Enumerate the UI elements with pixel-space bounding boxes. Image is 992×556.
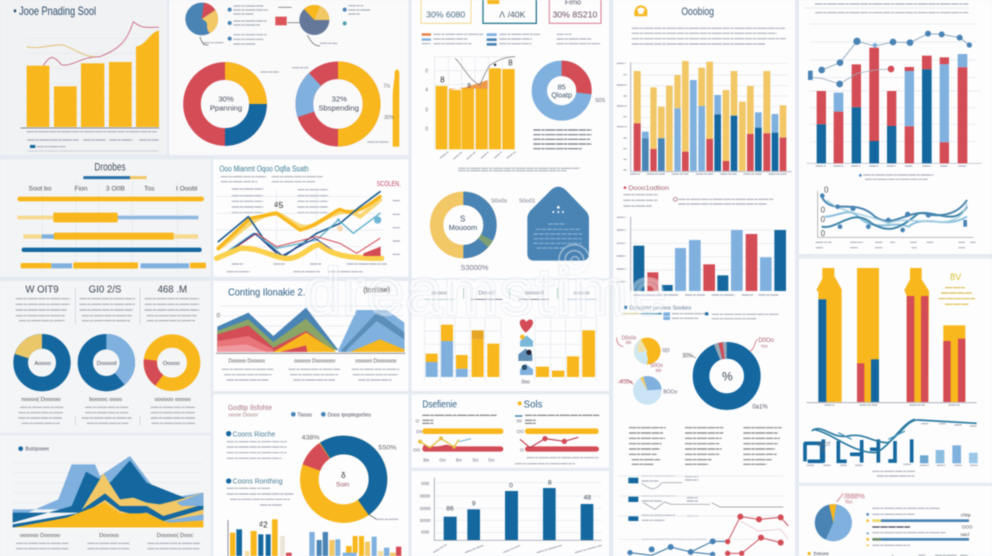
captions: oooooo Dooooooo [355, 359, 397, 365]
kpi box 3 [549, 0, 601, 23]
value labels: 9 [472, 500, 476, 507]
big donut [701, 350, 752, 402]
pie 1 labels: S0Oo [650, 363, 663, 369]
captions: Dooooo [99, 533, 119, 539]
notes [422, 415, 599, 423]
side progress bar: 7/s [383, 84, 391, 90]
progress list [866, 508, 973, 546]
donut: left [192, 71, 258, 137]
footer [515, 458, 598, 464]
donut: right label: Sbspending [318, 104, 359, 113]
pie [815, 504, 852, 541]
bars [444, 488, 593, 540]
watermark spiral [559, 245, 590, 275]
big donut callouts: D0Oo [758, 338, 775, 344]
tab labels [424, 288, 597, 299]
big donut callouts: %o [761, 343, 768, 348]
pie 1 labels: oo [656, 368, 661, 374]
panel: bottle bars [799, 259, 992, 483]
value labels: 0 [425, 108, 428, 114]
value labels: ● [493, 63, 497, 69]
heading left: Dsefienie [422, 400, 457, 411]
column labels: I Ooobl [176, 185, 198, 192]
axis labels [617, 63, 787, 174]
legend [291, 412, 372, 418]
captions [228, 359, 397, 365]
captions: Dooooo( Dooc [157, 533, 193, 539]
panel: layered area chart [0, 435, 211, 556]
heading: • Jooe Pnading Sool [13, 4, 96, 18]
axis labels [420, 481, 431, 535]
stat headings [25, 285, 187, 296]
donut: left label: 30% [218, 95, 234, 104]
step chart [804, 419, 977, 463]
donut: left label: Ppanning [210, 104, 242, 113]
x labels [824, 403, 960, 407]
pie 1 [634, 338, 661, 364]
value labels: 4 [425, 88, 428, 94]
wave axis: 0 [824, 186, 829, 195]
column labels: Tos [144, 185, 155, 192]
heading: Ooobiog [681, 6, 714, 18]
panel: blue bar chart [412, 471, 609, 556]
heading: Conting Ilonakie 2. [228, 287, 305, 298]
note 2: Coons Ronthing [233, 476, 283, 485]
areas [13, 456, 203, 528]
kpi box 3: 30% 8S210 [553, 9, 598, 19]
subheading [623, 185, 773, 206]
line markers [808, 31, 972, 87]
caption text [222, 369, 399, 380]
caption text [16, 543, 200, 549]
donut label: Qloatp [551, 92, 572, 99]
panel: combo bars top right [799, 0, 992, 254]
pie callout: %o [845, 500, 852, 506]
stat headings: W OIT9 [25, 285, 59, 296]
stacked bars [426, 325, 499, 377]
line markers [627, 514, 784, 556]
axis labels: S000 [420, 506, 431, 511]
pie 2 [633, 376, 662, 405]
donut callout: S0S [595, 98, 606, 104]
value labels: 0 [509, 482, 513, 489]
axis labels: Do [473, 458, 479, 463]
captions: oooooo Dooooooo [294, 359, 335, 365]
axis labels: Bo [456, 458, 462, 463]
bars caption [872, 465, 978, 476]
axis labels: O [520, 447, 524, 452]
legends [232, 189, 328, 213]
legend notes [200, 6, 370, 46]
text block [533, 130, 592, 149]
intro text [632, 28, 786, 44]
x labels [440, 152, 580, 171]
house shape note [527, 187, 589, 261]
tab labels: ooooo [574, 291, 590, 297]
captions [20, 533, 193, 539]
panel: multi line chart [213, 159, 408, 277]
yellow bars [536, 330, 595, 377]
panel: three donuts [0, 281, 211, 433]
progress list: chbp [961, 513, 971, 518]
pie: top right [299, 5, 329, 35]
value labels: 8 [440, 75, 445, 84]
yellow note [938, 272, 975, 304]
stacked bars [817, 48, 967, 163]
value labels: 0 [425, 127, 428, 133]
captions: oooooo ooooo [155, 397, 191, 403]
note 2 [226, 476, 293, 505]
gantt bars [17, 197, 206, 269]
orange band and line [449, 57, 515, 90]
donut 1 label: Aoooo [34, 361, 51, 367]
axis labels: S00 [421, 481, 430, 486]
column labels: Fion [75, 185, 88, 192]
pie callout [837, 491, 865, 506]
big donut label: % [722, 369, 733, 383]
yellow note: 8V [950, 272, 962, 282]
donut [539, 68, 584, 113]
axis labels: Oo [439, 458, 446, 463]
stat headings: 468 .M [158, 285, 187, 296]
pie 1 labels: D0o0o [622, 335, 637, 341]
value labels: 0 [425, 69, 428, 75]
pie 2 labels [618, 379, 677, 395]
tab labels: ooooo [431, 291, 447, 297]
bottle bar 2 [857, 268, 879, 402]
pie 2 labels: AS0o [620, 379, 632, 385]
legend [622, 305, 778, 320]
wave axis: 0 [821, 206, 826, 215]
pie 1 labels: 0(0 [662, 348, 670, 354]
table header [815, 4, 968, 13]
donut callouts [261, 68, 388, 142]
axis labels: S000 [420, 518, 431, 523]
captions: oooooo Dooooo [20, 533, 60, 539]
heading: Godtip Ilsfohte [228, 405, 272, 412]
panel: pies and legend [617, 295, 788, 556]
kpi box 1: 30% 6080 [426, 9, 465, 19]
progress list: OOO [962, 525, 973, 530]
heading: Ooo Mianmt Oqoo Oqfia Ssath [219, 164, 309, 173]
donut: right label: 32% [332, 95, 347, 104]
kpi box 2: ᐱ /40K [499, 9, 526, 19]
line chart [630, 517, 788, 555]
pale bars [920, 445, 978, 463]
panel: stacked bars with labels [412, 280, 609, 391]
stat headings: GI0 2/S [89, 285, 121, 296]
donut lower callouts: S0o0s [491, 199, 507, 205]
axis labels: O [416, 418, 420, 423]
donut: right [304, 70, 372, 138]
bottle bar 1 [816, 268, 842, 402]
subheading: Dooo1odtion [628, 185, 670, 192]
tab labels: ooooo0 [525, 291, 544, 297]
pie 2 labels: BOOo [663, 389, 677, 395]
three text columns [629, 428, 782, 464]
legend: Tisoso [297, 412, 312, 418]
captions: noooo( Dooooo [22, 397, 60, 403]
column labels [29, 185, 198, 192]
axis labels: Ba [423, 458, 429, 463]
axis labels: Do [488, 458, 495, 463]
wave axis [816, 186, 976, 248]
axis labels: OO [413, 447, 421, 452]
wave markers [820, 193, 967, 232]
donut lower [437, 198, 490, 252]
side progress bar: 30% [384, 115, 395, 121]
axis labels 2 [617, 217, 626, 282]
small bars: left [228, 519, 292, 556]
donut lower callouts [461, 199, 535, 272]
left lines [418, 436, 471, 449]
line legend rows [618, 476, 783, 539]
wave axis: 0 [821, 229, 826, 238]
red stat: SCOLEN, [377, 179, 401, 188]
donut lower label: S [460, 214, 465, 223]
pie 1 labels: oo [626, 340, 631, 346]
axis labels [227, 201, 400, 272]
sub heading: oooe Dooor [229, 413, 258, 419]
x labels [633, 293, 778, 297]
donut label: 85 [558, 82, 566, 91]
line series [217, 192, 382, 258]
heading: Droobes [94, 161, 126, 173]
captions: booooc oooo [89, 397, 122, 403]
callouts: 438% [302, 434, 320, 441]
panel: mountain chart [213, 281, 408, 391]
donut 1 [21, 341, 63, 384]
step chart labels: OBOT [817, 442, 831, 448]
big donut callouts [682, 338, 775, 411]
stat descriptions [16, 299, 199, 321]
caption text [18, 407, 195, 423]
bars [27, 31, 159, 127]
kpi box 2 [483, 0, 536, 23]
donut 2 [85, 342, 127, 384]
column labels: 3 O0B [106, 185, 125, 192]
kpi box 1 [421, 0, 471, 23]
value labels: 9 [467, 83, 471, 89]
donut [309, 445, 378, 514]
big donut callouts: 0a1% [752, 405, 768, 411]
bar 4 [943, 325, 965, 402]
bar chart [436, 68, 515, 149]
end markers [337, 216, 381, 256]
panel: donut with notes [213, 394, 408, 556]
donut 2 label: Dooood [97, 361, 117, 367]
wave axis: 0 [821, 215, 826, 224]
heading accent [83, 173, 130, 182]
sub heading [221, 177, 323, 182]
heading right: Sols [524, 400, 543, 411]
progress bars [422, 428, 599, 452]
donut 3 label: Ooooo [163, 361, 180, 367]
donut lower label: Mouoom [449, 223, 477, 232]
icons column [518, 319, 533, 385]
axis labels [413, 418, 524, 463]
axis labels [27, 132, 159, 147]
panel: kpi bars and donut [412, 0, 609, 278]
value labels [446, 479, 591, 512]
axis labels: 00 [517, 418, 522, 423]
tab labels: Dooo0 [478, 291, 495, 297]
panel: timeline bars [0, 159, 211, 277]
callouts: 5S0% [378, 444, 396, 451]
watermark: dreamstime [305, 257, 665, 327]
icon: yellow badge [634, 6, 647, 16]
line overlay [810, 34, 969, 84]
value labels [425, 58, 513, 133]
bar chart 2 [633, 230, 786, 291]
note 1 [226, 429, 287, 458]
small bars: left: ₫2 [259, 521, 268, 530]
donut label: δ [341, 471, 346, 480]
panel: revenue bar chart [0, 0, 167, 155]
axis labels: OO [517, 429, 524, 434]
big donut callouts: 30% [682, 352, 692, 359]
panel: tall column of charts [613, 0, 795, 556]
legend: Butripower [25, 447, 50, 453]
note 1: Coons Rioche [233, 429, 275, 438]
pie: top left [185, 3, 218, 35]
x labels [816, 166, 967, 179]
side progress bar [383, 69, 399, 147]
right lines [520, 436, 578, 448]
donut lower callouts: S0o01 [519, 199, 535, 205]
trend lines [27, 22, 159, 66]
value labels: 8 [548, 479, 552, 486]
wave chart [822, 197, 967, 229]
tag: (tonitise) [363, 285, 390, 295]
value labels: 8 [508, 58, 513, 67]
pie callout: /888% [844, 491, 865, 500]
axis labels: Ds [416, 429, 423, 434]
column labels: Soot bo [29, 185, 52, 192]
small bars: right [309, 532, 401, 556]
callouts [302, 434, 398, 519]
bottom legend [808, 551, 968, 556]
panel: progress and lines [412, 394, 609, 468]
value labels: 86 [446, 505, 454, 512]
stacked chart [634, 61, 786, 171]
donut 3 [150, 341, 194, 384]
watermark: dreamstime [305, 257, 665, 327]
legend: Dosspist poooos Sookes [630, 305, 691, 311]
value labels: 48 [584, 494, 591, 501]
panel: mountain chart: 0 [217, 313, 221, 319]
progress list: tatcl [961, 532, 969, 537]
axis labels: S00 [421, 530, 430, 535]
icons column: 0oo [521, 379, 530, 385]
bottom legend: Extoora [814, 551, 829, 556]
panel: donut charts [169, 0, 408, 155]
captions: Dooooo Dooooo [228, 359, 265, 365]
areas [217, 308, 404, 352]
pie 1 labels [617, 335, 670, 374]
captions [22, 397, 191, 403]
donut lower callouts: S3000% [461, 263, 489, 272]
axis labels: 0000 [420, 494, 431, 499]
donut label: Soin [336, 481, 350, 488]
panel: pie and progress [799, 486, 992, 556]
step chart labels: M [821, 448, 825, 454]
legend: Doos Ipoplegorlies [328, 412, 372, 418]
step chart labels [807, 424, 977, 465]
chart icon: ₫5 [274, 200, 283, 210]
legend rows [422, 33, 600, 46]
bottle bar 3 [904, 268, 929, 402]
x labels [433, 544, 602, 553]
